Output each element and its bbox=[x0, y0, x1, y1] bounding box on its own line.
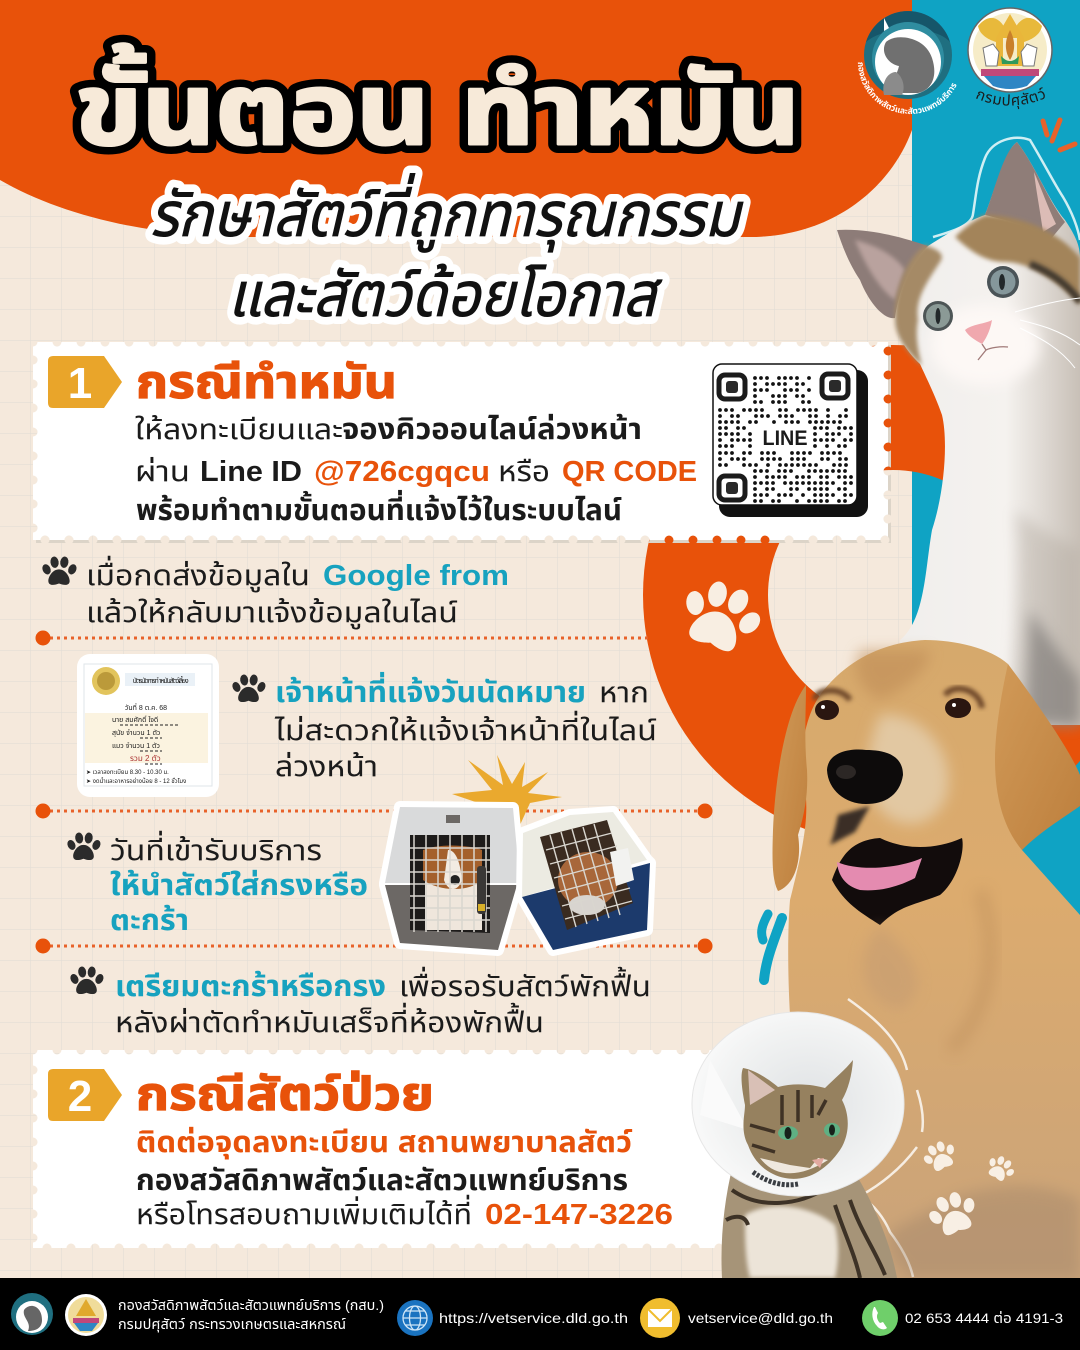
QR code bbox=[713, 364, 868, 517]
subtitle line 2: และสัตว์ด้อยโอกาส bbox=[228, 261, 663, 330]
blue carrier with cat bbox=[522, 812, 650, 950]
icon: paw bbox=[66, 832, 102, 860]
email text: vetservice@dld.go.th bbox=[688, 1310, 833, 1326]
badge 1: 1 bbox=[68, 359, 92, 408]
recovery text: เพื่อรอรับสัตว์พักฟื้น bbox=[399, 966, 651, 1003]
carrier text: ให้นำสัตว์ใส่กรงหรือ bbox=[110, 870, 368, 902]
orange ring decoration bbox=[643, 345, 1080, 845]
teal brush strokes bbox=[762, 914, 782, 980]
body text step 2: หรือโทรสอบถามเพิ่มเติมได้ที่ bbox=[136, 1194, 472, 1231]
title: ขั้นตอน ทำหมัน bbox=[75, 43, 800, 166]
step: google form bbox=[41, 555, 509, 630]
title: ขั้นตอน ทำหมัน bbox=[75, 43, 800, 166]
grey carrier with dog bbox=[385, 807, 520, 950]
QR code: LINE bbox=[762, 427, 808, 450]
step: bring pet in carrier bbox=[66, 830, 368, 937]
icon: phone bbox=[862, 1300, 898, 1336]
body text step 1: @726cgqcu bbox=[314, 456, 490, 488]
heading: sterilization case: กรณีทำหมัน bbox=[136, 356, 397, 408]
logo: animal welfare division bbox=[858, 11, 956, 114]
recovery text: หลังผ่าตัดทำหมันเสร็จที่ห้องพักฟื้น bbox=[115, 1002, 544, 1039]
subtitle line 1: รักษาสัตว์ที่ถูกทารุณกรรม bbox=[150, 173, 744, 253]
footer bar bbox=[0, 1278, 1080, 1350]
logo: department of livestock development: กรมปศุสัตว์ bbox=[976, 87, 1045, 110]
google form text bbox=[86, 555, 509, 630]
form image card: นาย สมศักดิ์ ใจดี bbox=[112, 715, 158, 724]
form image card: รวม 2 ตัว bbox=[130, 754, 161, 763]
badge 2: 2 bbox=[68, 1072, 92, 1121]
body text step 1: ให้ลงทะเบียนและ bbox=[135, 414, 343, 446]
body text step 1: หรือ bbox=[498, 456, 550, 488]
google form text: เมื่อกดส่งข้อมูลใน bbox=[86, 555, 310, 593]
orange header shape bbox=[0, 0, 912, 237]
carrier text bbox=[110, 830, 368, 937]
teal column bbox=[912, 0, 1080, 930]
recovery text bbox=[115, 966, 651, 1039]
divider 3 bbox=[36, 938, 712, 954]
appointment text bbox=[274, 671, 657, 783]
subtitle line 2: และสัตว์ด้อยโอกาส bbox=[228, 261, 663, 330]
photo: pet carriers bbox=[385, 807, 650, 950]
heading: sick animal case: กรณีสัตว์ป่วย bbox=[136, 1068, 434, 1120]
website text: https://vetservice.dld.go.th bbox=[439, 1310, 628, 1326]
footer organisation text bbox=[118, 1297, 384, 1333]
body text step 2 bbox=[136, 1127, 673, 1231]
recovery text: เตรียมตะกร้าหรือกรง bbox=[115, 971, 386, 1003]
divider 2 bbox=[36, 804, 712, 818]
icon: paw bbox=[231, 674, 267, 702]
step: prepare recovery carrier bbox=[69, 966, 651, 1039]
form image card: สุนัข จำนวน 1 ตัว bbox=[112, 729, 160, 738]
white paw on orange ring bbox=[671, 570, 772, 660]
starburst bbox=[452, 755, 562, 825]
google form text: Google from bbox=[323, 560, 509, 592]
appointment text: เจ้าหน้าที่แจ้งวันนัดหมาย bbox=[275, 671, 586, 709]
carrier text: ตะกร้า bbox=[110, 905, 189, 937]
photo: dog bbox=[773, 640, 1080, 1278]
panel: step 1 card bbox=[33, 342, 891, 543]
badge 1 bbox=[48, 356, 122, 408]
panel: step 2 card bbox=[33, 1050, 733, 1248]
appointment text: ไม่สะดวกให้แจ้งเจ้าหน้าที่ในไลน์ bbox=[274, 710, 657, 747]
photo: cat with cone bbox=[692, 1012, 904, 1278]
carrier text: วันที่เข้ารับบริการ bbox=[110, 830, 322, 867]
phone text: 02 653 4444 ต่อ 4191-3 bbox=[905, 1310, 1063, 1326]
footer logo: division bbox=[11, 1293, 53, 1335]
footer organisation text: กรมปศุสัตว์ กระทรวงเกษตรและสหกรณ์ bbox=[118, 1316, 346, 1333]
body text step 1 bbox=[135, 414, 697, 527]
logo: department of livestock development bbox=[967, 7, 1053, 110]
footer organisation text: กองสวัสดิภาพสัตว์และสัตวแพทย์บริการ (กสบ.) bbox=[118, 1297, 384, 1313]
appointment text: หาก bbox=[599, 677, 649, 709]
beige hole below teal column left of dog bbox=[880, 920, 1080, 1280]
logo: animal welfare division: กองสวัสดิภาพสัตว์และสัตวแพทย์บริการ bbox=[858, 62, 956, 114]
body text step 1: จองคิวออนไลน์ล่วงหน้า bbox=[342, 414, 642, 446]
footer logo: department bbox=[65, 1294, 107, 1336]
body text step 1: Line ID bbox=[200, 456, 302, 488]
form image card: แมว จำนวน 1 ตัว bbox=[112, 742, 160, 750]
form image card: วันที่ 8 ต.ค. 68 bbox=[125, 702, 167, 712]
appointment text: ล่วงหน้า bbox=[275, 751, 378, 783]
white paws on dog chest bbox=[918, 1136, 1019, 1240]
body text step 1: ผ่าน bbox=[135, 456, 190, 488]
divider 1 bbox=[36, 630, 650, 646]
body text step 2: ติดต่อจุดลงทะเบียน สถานพยาบาลสัตว์ bbox=[136, 1127, 633, 1159]
form image card: ➤ งดน้ำและอาหารอย่างน้อย 8 - 12 ชั่วโมง bbox=[86, 776, 186, 785]
icon: paw bbox=[41, 556, 78, 585]
body text step 2: กองสวัสดิภาพสัตว์และสัตวแพทย์บริการ bbox=[136, 1165, 628, 1197]
icon: paw bbox=[69, 966, 105, 994]
body text step 1: พร้อมทำตามขั้นตอนที่แจ้งไว้ในระบบไลน์ bbox=[136, 489, 622, 527]
photo: kitten bbox=[837, 120, 1080, 725]
body text step 2: 02-147-3226 bbox=[485, 1199, 673, 1231]
form image card: ➤ เวลาลงทะเบียน 8.30 - 10.30 น. bbox=[86, 769, 169, 776]
form image card: บัตรนัดการทำหมันสัตว์เลี้ยง bbox=[133, 675, 189, 685]
subtitle line 1: รักษาสัตว์ที่ถูกทารุณกรรม bbox=[150, 173, 744, 253]
icon: mail bbox=[640, 1298, 680, 1338]
icon: globe bbox=[397, 1300, 433, 1336]
badge 2 bbox=[48, 1069, 122, 1121]
form image card bbox=[77, 654, 219, 797]
body text step 1: QR CODE bbox=[562, 456, 697, 488]
step: staff appointment bbox=[231, 671, 657, 783]
google form text: แล้วให้กลับมาแจ้งข้อมูลในไลน์ bbox=[86, 597, 458, 630]
